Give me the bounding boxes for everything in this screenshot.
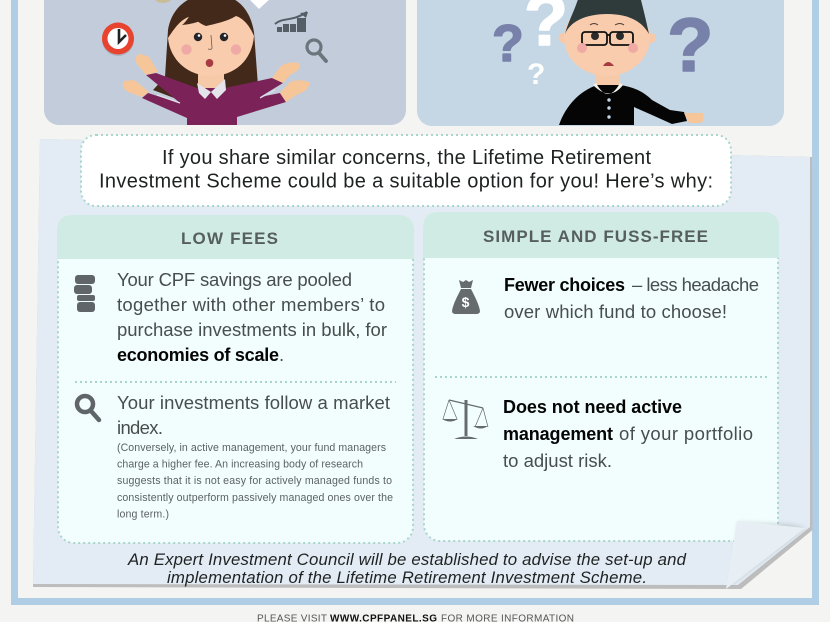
text: no active management: to adjust risk. — [503, 450, 612, 471]
icon: question marks — [492, 0, 713, 91]
heading: low fees — [57, 215, 414, 259]
text: market index: long term.) — [117, 508, 169, 520]
text: expert council note: implementation of the Lifetime Retirement Investment Scheme. — [167, 568, 647, 587]
panel: low fees — [57, 215, 414, 543]
icon: magnifier — [77, 396, 99, 420]
illustration: woman — [123, 0, 310, 125]
heading: simple and fuss-free: SIMPLE AND FUSS-FREE — [483, 227, 708, 246]
text: market index: consistently outperform passively managed ones over the — [117, 492, 393, 504]
icon: magnifier — [307, 40, 326, 61]
text: no active management: of your portfolio — [619, 423, 753, 444]
panel: woman with many concerns — [44, 0, 406, 125]
icon: document — [248, 0, 271, 9]
icon: question marks: ? — [492, 15, 524, 73]
text: no active management: Does not need active — [503, 397, 682, 417]
text: market index: (Conversely, in active management, your fund managers — [117, 442, 386, 454]
footer: more information — [257, 614, 574, 622]
icon: question marks: ? — [667, 3, 713, 88]
text: pooled savings: together with other members’ to — [117, 294, 385, 315]
text: pooled savings: . — [279, 344, 284, 365]
text: pooled savings: purchase investments in bulk, for — [117, 319, 387, 340]
text: pooled savings: economies of scale — [117, 345, 279, 365]
icon: money bag: $ — [462, 294, 470, 310]
callout: intro statement — [81, 135, 731, 206]
text: expert council note — [127, 550, 687, 587]
text: market index: charge a higher fee. An increasing body of research — [117, 458, 363, 470]
text: market index: index. — [117, 417, 163, 438]
icon: question marks: ? — [527, 58, 545, 91]
icon: coin stack — [74, 275, 95, 312]
text: fewer choices — [504, 274, 759, 322]
illustration: man — [558, 0, 704, 125]
folded paper corner — [726, 521, 806, 589]
icon: coin — [154, 0, 172, 3]
icon: balance scales — [442, 400, 488, 439]
text: fewer choices: Fewer choices — [504, 275, 625, 295]
panel: simple and fuss-free — [423, 212, 779, 541]
icon: clock — [102, 22, 134, 56]
text: market index — [117, 392, 393, 520]
panel: confused man — [417, 0, 784, 126]
callout: intro statement: Investment Scheme could be a suitable option for you! Here’s why: — [99, 170, 713, 192]
text: fewer choices: – less headache — [632, 274, 759, 295]
paper note background — [33, 139, 812, 589]
text: market index: suggests that it is not easy for actively managed funds to — [117, 475, 392, 487]
text: pooled savings — [117, 269, 387, 365]
icon: money bag — [452, 280, 480, 314]
text: expert council note: An Expert Investment Council will be established to advise the set-up and — [127, 550, 687, 569]
text: no active management: management — [503, 424, 613, 444]
icon: rising chart — [275, 12, 308, 32]
heading: low fees: LOW FEES — [181, 229, 278, 248]
callout: intro statement: If you share similar concerns, the Lifetime Retirement — [162, 147, 651, 169]
text: pooled savings: Your CPF savings are pooled — [117, 269, 352, 290]
text: market index: Your investments follow a market — [117, 392, 390, 413]
heading: simple and fuss-free — [423, 212, 779, 258]
text: no active management — [503, 397, 753, 471]
text: fewer choices: over which fund to choose! — [504, 301, 727, 322]
